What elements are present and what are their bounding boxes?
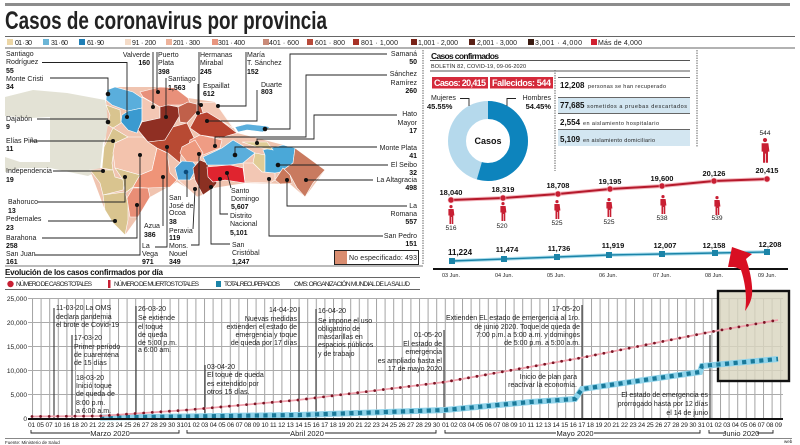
legend: cases per province: 1,001 · 2,000 bbox=[418, 40, 458, 47]
callout: not specified: No especificado: 493 bbox=[349, 255, 417, 262]
map labels: provinces: Ramírez bbox=[391, 80, 417, 87]
legend: evolution chart: OMS: ORGANIZACIÓN MUNDIAL DE LA SALUD bbox=[294, 279, 410, 288]
stats table: 77,685 bbox=[560, 101, 585, 110]
map labels: provinces: 55 bbox=[6, 68, 14, 75]
annotations: Inicio de plan para bbox=[520, 374, 577, 381]
map labels: provinces: Plata bbox=[158, 60, 174, 67]
panel: confirmed cases heading: Casos confirmados bbox=[431, 51, 499, 61]
annotations: de 5:00 p.m. a 5:00 a.m. bbox=[504, 340, 580, 347]
annotations: El estado de emergencia es bbox=[621, 392, 708, 399]
line chart: June daily cases, deaths and recovered: 20,126 bbox=[703, 169, 725, 178]
annotations: de queda bbox=[138, 332, 167, 339]
chart y axis labels: 25,000 bbox=[7, 296, 27, 303]
map labels: provinces: San Juan bbox=[6, 251, 36, 258]
annotations: es ampliado hasta el bbox=[378, 358, 442, 365]
annotations: 03-04-20 bbox=[207, 364, 235, 371]
chart x axis dates: 01 05 07 10 16 18 20 21 22 23 24 25 26 27 28 29 30 31 bbox=[28, 422, 184, 429]
annotations: 26-03-20 bbox=[138, 306, 166, 313]
chart y axis labels bbox=[7, 296, 27, 423]
title: Casos de coronavirus por provincia bbox=[5, 7, 328, 35]
chart month brackets: Marzo 2020 bbox=[90, 429, 130, 438]
map labels: provinces: Peravia bbox=[169, 228, 193, 235]
map labels: provinces: Monte Plata bbox=[380, 145, 417, 152]
annotations: 01-05-20 bbox=[414, 332, 442, 339]
map labels: provinces: Domingo bbox=[231, 196, 259, 203]
chart x axis dates: 01 02 03 04 05 06 07 08 09 10 11 12 13 14 15 16 17 18 19 20 21 22 23 24 25 26 27 28 29 30 31 bbox=[442, 422, 705, 429]
map labels: provinces: Pedernales bbox=[6, 216, 42, 223]
chart y axis labels: 5,000 bbox=[10, 392, 27, 399]
annotations: Se extiende bbox=[138, 315, 175, 322]
map labels: provinces: La bbox=[142, 243, 150, 250]
line chart: June daily cases, deaths and recovered: 12,007 bbox=[654, 241, 676, 250]
legend: cases per province: 301 · 400 bbox=[218, 40, 245, 47]
map labels: provinces: Santiago bbox=[6, 51, 34, 58]
map labels: provinces: San Pedro bbox=[384, 233, 417, 240]
map labels: provinces: 386 bbox=[144, 232, 156, 239]
stats table: en aislamiento domiciliario bbox=[583, 138, 655, 144]
map labels: provinces: José de bbox=[169, 203, 194, 210]
series: recovered bbox=[100, 359, 778, 418]
panel: confirmed cases heading: BOLETÍN 82, COVID-19, 09-06-2020 bbox=[431, 63, 526, 70]
annotations: Nuevas medidas bbox=[245, 316, 297, 323]
annotations: de 5:00 p.m. bbox=[138, 340, 177, 347]
map labels: provinces: Romana bbox=[391, 211, 417, 218]
map labels: provinces bbox=[6, 51, 418, 266]
map labels: provinces: María bbox=[247, 52, 265, 59]
legend: cases per province: 601 · 800 bbox=[315, 40, 345, 47]
line chart: June daily cases, deaths and recovered: 19,600 bbox=[651, 174, 673, 183]
annotations: 16-04-20 bbox=[318, 308, 346, 315]
map: Dominican provinces bbox=[90, 87, 325, 235]
line chart: June daily cases, deaths and recovered: 11,919 bbox=[602, 241, 624, 250]
donut chart: cases by sex: 45.55% bbox=[427, 102, 453, 111]
map labels: provinces: La Altagracia bbox=[377, 177, 417, 184]
annotations: el 14 de junio bbox=[666, 410, 708, 417]
map labels: provinces: 612 bbox=[203, 91, 215, 98]
map labels: provinces: Cristóbal bbox=[232, 250, 260, 257]
map labels: provinces: San bbox=[232, 242, 245, 249]
map labels: provinces: Mirabal bbox=[200, 60, 223, 67]
map labels: provinces: Santo bbox=[231, 188, 249, 195]
annotations: Se impone el uso bbox=[318, 318, 372, 325]
line chart: June daily cases, deaths and recovered: 09 Jun. bbox=[758, 273, 776, 279]
chart month brackets bbox=[31, 429, 773, 438]
chart x axis dates: 01 02 03 04 05 06 07 08 09 10 11 12 13 14 15 16 17 18 19 20 21 22 23 24 25 26 27 28 29 30 bbox=[184, 422, 440, 429]
legend: cases per province: 91 · 200 bbox=[132, 40, 156, 47]
map labels: provinces: 41 bbox=[409, 153, 417, 160]
chart x axis dates bbox=[28, 422, 782, 429]
annotations: de junio 2020. Toque de queda de bbox=[474, 324, 580, 331]
annotations: emergencia y toque bbox=[236, 332, 297, 339]
map labels: provinces: Azua bbox=[144, 223, 160, 230]
stats table: personas se han recuperado bbox=[588, 84, 666, 90]
map labels: provinces: Espaillat bbox=[203, 83, 230, 90]
line chart: June daily cases, deaths and recovered: 520 bbox=[496, 223, 508, 230]
annotations: 8:00 p.m. bbox=[76, 400, 105, 407]
map labels: provinces: Hato bbox=[402, 111, 417, 118]
line chart: June daily cases, deaths and recovered: 06 Jun. bbox=[599, 273, 617, 279]
stats table: 12,208 bbox=[560, 81, 585, 90]
map: island underlay bbox=[90, 87, 325, 235]
map labels: provinces: Dajabón bbox=[6, 116, 32, 123]
map labels: provinces: Mons. bbox=[169, 243, 188, 250]
annotations: otros 15 días. bbox=[207, 389, 249, 396]
line chart: June daily cases, deaths and recovered: 544 bbox=[759, 130, 771, 137]
legend: evolution chart: NÚMERO DE CASOS TOTALES bbox=[16, 279, 93, 288]
line chart: June daily cases, deaths and recovered: 525 bbox=[551, 220, 563, 227]
annotations: 17 de mayo 2020 bbox=[388, 366, 442, 373]
annotations: 18-03-20 bbox=[76, 375, 104, 382]
annotations: emergencia bbox=[405, 349, 442, 356]
legend: cases per province: 801 · 1,000 bbox=[361, 40, 398, 47]
annotations: extienden el estado de bbox=[227, 324, 297, 331]
credit: web bbox=[784, 439, 793, 444]
annotations: de 15 días bbox=[74, 360, 107, 367]
map labels: provinces: Puerto bbox=[158, 52, 179, 59]
line chart: evolution of confirmed cases bbox=[7, 291, 789, 438]
line chart: June daily cases, deaths and recovered: 19,195 bbox=[599, 177, 621, 186]
legend: cases per province: 31 · 60 bbox=[51, 40, 68, 47]
map labels: provinces: 17 bbox=[409, 128, 417, 135]
map labels: provinces: 152 bbox=[247, 69, 259, 76]
map labels: provinces: Nouel bbox=[169, 251, 188, 258]
line chart: June daily cases, deaths and recovered: 12,158 bbox=[703, 241, 725, 250]
annotations: 7:00 p.m. a 5:00 a.m. y domingos bbox=[476, 332, 580, 339]
donut chart: cases by sex bbox=[427, 95, 551, 172]
legend: cases per province: Más de 4,000 bbox=[598, 40, 642, 47]
arrow: red pointer to June period bbox=[728, 247, 752, 311]
annotations: y de trabajo bbox=[318, 351, 355, 358]
line chart: June daily cases, deaths and recovered: 18,319 bbox=[492, 185, 514, 194]
callout: cases and deaths totals: Casos: 20,415 bbox=[434, 78, 486, 88]
map labels: provinces: Santiago bbox=[168, 76, 196, 83]
line chart: June daily cases, deaths and recovered: 516 bbox=[445, 225, 457, 232]
map labels: provinces: 971 bbox=[142, 259, 154, 266]
map labels: provinces: 498 bbox=[405, 185, 417, 192]
annotations: espacios públicos bbox=[318, 342, 374, 349]
chart month brackets: Abril 2020 bbox=[290, 429, 324, 438]
map: Haiti bbox=[5, 90, 110, 176]
annotations: Inició toque bbox=[76, 383, 112, 390]
stats table: 2,554 bbox=[560, 118, 581, 127]
map labels: provinces: 5,101 bbox=[230, 230, 248, 237]
map labels: provinces: 349 bbox=[169, 259, 181, 266]
line chart: June daily cases, deaths and recovered: 12,208 bbox=[759, 240, 781, 249]
map labels: provinces: Monte Cristi bbox=[6, 76, 44, 83]
annotations: mascarillas en bbox=[318, 334, 363, 341]
chart y axis labels: 0 bbox=[23, 416, 27, 423]
annotations: 17-05-20 bbox=[552, 306, 580, 313]
legend: cases per province: 3,001 · 4,000 bbox=[535, 40, 582, 47]
annotations: prorrogado hasta por 12 días bbox=[618, 401, 708, 408]
annotations: 14-04-20 bbox=[269, 307, 297, 314]
map labels: provinces: 13 bbox=[8, 208, 16, 215]
donut chart: cases by sex: 54.45% bbox=[526, 102, 551, 111]
annotations: declara pandemia bbox=[56, 314, 112, 321]
legend: cases per province: 201 · 300 bbox=[173, 40, 200, 47]
donut chart: cases by sex: Mujeres bbox=[431, 95, 456, 102]
map labels: provinces: La bbox=[409, 203, 417, 210]
annotations: Primer período bbox=[74, 344, 120, 351]
chart y axis labels: 10,000 bbox=[7, 368, 27, 375]
highlight box: June period bbox=[718, 291, 789, 381]
line chart: June daily cases, deaths and recovered: 03 Jun. bbox=[442, 273, 460, 279]
line chart: June daily cases, deaths and recovered: 538 bbox=[656, 215, 668, 222]
map labels: provinces: Duarte bbox=[261, 82, 282, 89]
stats table: sometidos a pruebas descartados bbox=[587, 104, 687, 110]
map labels: provinces: Rodríguez bbox=[6, 59, 39, 66]
legend: cases per province: 01 · 30 bbox=[15, 40, 32, 47]
annotations: el toque bbox=[138, 324, 163, 331]
legend: cases per province: 61 · 90 bbox=[87, 40, 104, 47]
legend: evolution chart: TOTAL RECUPERADOS bbox=[224, 281, 281, 288]
series: total cases bbox=[32, 320, 778, 416]
annotations: reactivar la economía. bbox=[508, 382, 577, 389]
map labels: provinces: 245 bbox=[200, 69, 212, 76]
source note: Fuente: Ministerio de Salud bbox=[5, 440, 60, 445]
chart y axis labels: 15,000 bbox=[7, 344, 27, 351]
callout: not specified bbox=[334, 250, 418, 264]
line chart: June daily cases, deaths and recovered bbox=[433, 130, 788, 279]
map labels: provinces: 160 bbox=[138, 60, 150, 67]
chart month brackets: Junio 2020 bbox=[723, 429, 759, 438]
stats table bbox=[558, 78, 690, 146]
map labels: provinces: Mayor bbox=[398, 120, 418, 127]
map labels: provinces: Samaná bbox=[391, 51, 417, 58]
legend: cases per province: 2,001 · 3,000 bbox=[477, 40, 517, 47]
map labels: provinces: Distrito bbox=[230, 213, 252, 220]
chart y axis labels: 20,000 bbox=[7, 320, 27, 327]
map labels: provinces: 161 bbox=[6, 259, 18, 266]
map labels: provinces: 38 bbox=[169, 219, 177, 226]
chart month brackets: Mayo 2020 bbox=[556, 429, 594, 438]
legend: evolution chart: NÚMERO DE MUERTOS TOTALES bbox=[114, 279, 200, 288]
donut chart: cases by sex: Casos bbox=[474, 136, 502, 146]
legend: cases per province: 401 · 600 bbox=[269, 40, 299, 47]
annotations: obligatorio de bbox=[318, 326, 360, 333]
map labels: provinces: 260 bbox=[405, 88, 417, 95]
callout: cases and deaths totals bbox=[432, 77, 553, 88]
map labels: provinces: 1,563 bbox=[168, 85, 186, 92]
line chart: June daily cases, deaths and recovered: 11,224 bbox=[448, 248, 473, 257]
line chart: June daily cases, deaths and recovered: 18,708 bbox=[547, 181, 569, 190]
map labels: provinces: 32 bbox=[409, 170, 417, 177]
map labels: provinces: 11 bbox=[6, 146, 14, 153]
annotations bbox=[56, 305, 708, 417]
map labels: provinces: 398 bbox=[158, 69, 170, 76]
map labels: provinces: Barahona bbox=[6, 235, 36, 242]
stats table: 5,109 bbox=[560, 135, 581, 144]
map labels: provinces: 50 bbox=[409, 59, 417, 66]
line chart: June daily cases, deaths and recovered: 08 Jun. bbox=[705, 273, 723, 279]
map labels: provinces: Nacional bbox=[230, 221, 258, 228]
map labels: provinces: Sánchez bbox=[390, 71, 417, 78]
map labels: provinces: Independencia bbox=[6, 168, 52, 175]
line chart: June daily cases, deaths and recovered: 539 bbox=[711, 215, 723, 222]
annotations: de queda por 17 días bbox=[231, 340, 297, 347]
map labels: provinces: T. Sánchez bbox=[247, 60, 282, 67]
map labels: provinces: 119 bbox=[169, 235, 180, 242]
map labels: provinces: 23 bbox=[6, 225, 14, 232]
map labels: provinces: 19 bbox=[6, 177, 14, 184]
line chart: June daily cases, deaths and recovered: 18,040 bbox=[440, 188, 462, 197]
map labels: provinces: 258 bbox=[6, 243, 18, 250]
line chart: June daily cases, deaths and recovered: 11,474 bbox=[496, 245, 519, 254]
section heading: daily evolution: Evolución de los casos confirmados por día bbox=[5, 268, 164, 277]
annotations: 11-03-20 La OMS bbox=[56, 305, 111, 312]
panel: confirmed cases heading bbox=[430, 51, 690, 71]
annotations: 17-03-20 bbox=[74, 335, 102, 342]
line chart: June daily cases, deaths and recovered: 525 bbox=[603, 219, 615, 226]
annotations: el brote de Covid-19 bbox=[56, 322, 119, 329]
donut chart: cases by sex: Hombres bbox=[523, 95, 551, 102]
map labels: provinces: Vega bbox=[142, 251, 158, 258]
line chart: June daily cases, deaths and recovered: 04 Jun. bbox=[495, 273, 513, 279]
map labels: provinces: 34 bbox=[6, 84, 14, 91]
line chart: June daily cases, deaths and recovered: 05 Jun. bbox=[547, 273, 565, 279]
annotations: a 6:00 a.m. bbox=[76, 408, 111, 415]
annotations: de queda de bbox=[76, 391, 115, 398]
map labels: provinces: 803 bbox=[261, 89, 273, 96]
annotations: es extendido por bbox=[207, 381, 259, 388]
map labels: provinces: Bahoruco bbox=[8, 199, 38, 206]
map labels: provinces: Ocoa bbox=[169, 210, 186, 217]
callout: cases and deaths totals: Fallecidos: 544 bbox=[492, 78, 551, 88]
map labels: provinces: 557 bbox=[405, 219, 417, 226]
map labels: provinces: Valverde bbox=[123, 52, 150, 59]
annotations: de cuarentena bbox=[74, 352, 119, 359]
legend: evolution chart bbox=[5, 278, 420, 290]
annotations: a 6:00 am. bbox=[138, 347, 171, 354]
map labels: provinces: Elías Piña bbox=[6, 138, 38, 145]
map labels: provinces: El Seibo bbox=[391, 162, 417, 169]
map labels: provinces: San bbox=[169, 195, 182, 202]
map labels: provinces: 1,247 bbox=[232, 259, 250, 266]
line chart: June daily cases, deaths and recovered: 11,736 bbox=[548, 244, 570, 253]
annotations: El estado de bbox=[403, 341, 442, 348]
line chart: June daily cases, deaths and recovered: 20,415 bbox=[756, 166, 778, 175]
line chart: June daily cases, deaths and recovered: 07 Jun. bbox=[653, 273, 671, 279]
annotations: El toque de queda bbox=[207, 372, 264, 379]
chart x axis dates: 01 02 03 04 05 06 07 08 09 bbox=[706, 422, 782, 429]
map labels: provinces: 5,607 bbox=[231, 204, 249, 211]
map labels: provinces: 9 bbox=[6, 124, 10, 131]
map labels: provinces: 151 bbox=[405, 241, 417, 248]
map labels: provinces: Hermanas bbox=[200, 52, 233, 59]
annotations: Extienden EL estado de emergencia al 1ro. bbox=[446, 315, 580, 322]
legend: cases per province bbox=[5, 36, 795, 48]
map leader lines and markers bbox=[30, 52, 407, 255]
stats table: en aislamiento hospitalario bbox=[583, 121, 659, 127]
